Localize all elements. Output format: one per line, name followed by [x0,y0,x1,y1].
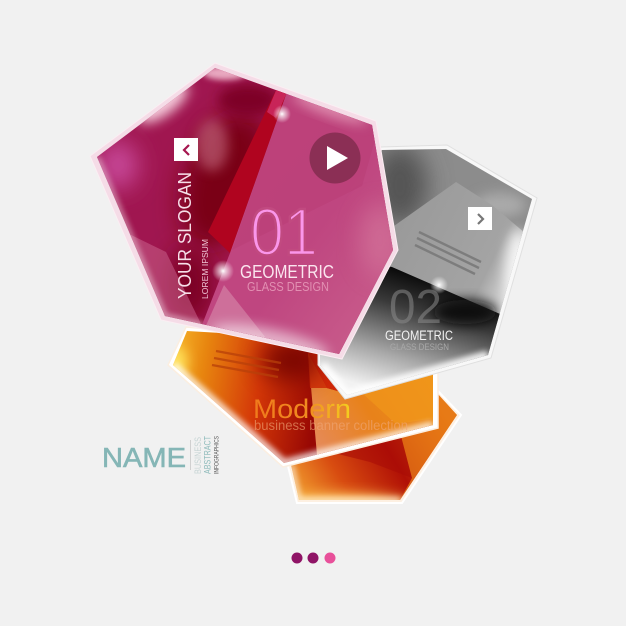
panel: lower left pale pane [130,234,201,324]
text: GLASS DESIGN: GLASS DESIGN [390,342,449,353]
logo: NAME [102,436,220,474]
icon: text lines [212,351,281,377]
text: business banner collection: business banner collection [254,418,408,433]
text: GLASS DESIGN: GLASS DESIGN [247,279,329,294]
text: ABSTRACT: ABSTRACT [202,436,214,474]
panel: light envelope pane [391,182,523,314]
number: 02: 02 [389,281,442,334]
sparkle [212,260,234,282]
panel: dark lower pane [320,266,500,395]
icon: text lines [415,232,481,274]
text: LOREM IPSUM: LOREM IPSUM [200,239,210,299]
icon: play button [310,132,360,184]
text: GEOMETRIC: GEOMETRIC [385,328,453,343]
heading: Modern: Modern [253,394,351,424]
logo: NAME: NAME [102,442,186,473]
sparkle [273,105,291,123]
panel: gray hexagon [310,140,545,405]
icon: next button [468,207,492,230]
number: 01: 01 [250,195,318,270]
panel: lighter right pane [308,353,436,455]
pagination dots [292,552,336,564]
text: INFOGRAPHICS: INFOGRAPHICS [214,436,220,474]
panel: orange main banner [167,326,439,468]
text: YOUR SLOGAN: YOUR SLOGAN [175,172,195,299]
panel: red strip [208,88,287,253]
panel: orange back banner [288,391,462,504]
sparkle [430,276,448,294]
panel: light glass pane [200,92,400,362]
icon: back button [174,138,198,161]
text: BUSINESS: BUSINESS [193,437,204,474]
panel: pink hexagon [85,60,405,367]
text: GEOMETRIC: GEOMETRIC [240,262,334,282]
